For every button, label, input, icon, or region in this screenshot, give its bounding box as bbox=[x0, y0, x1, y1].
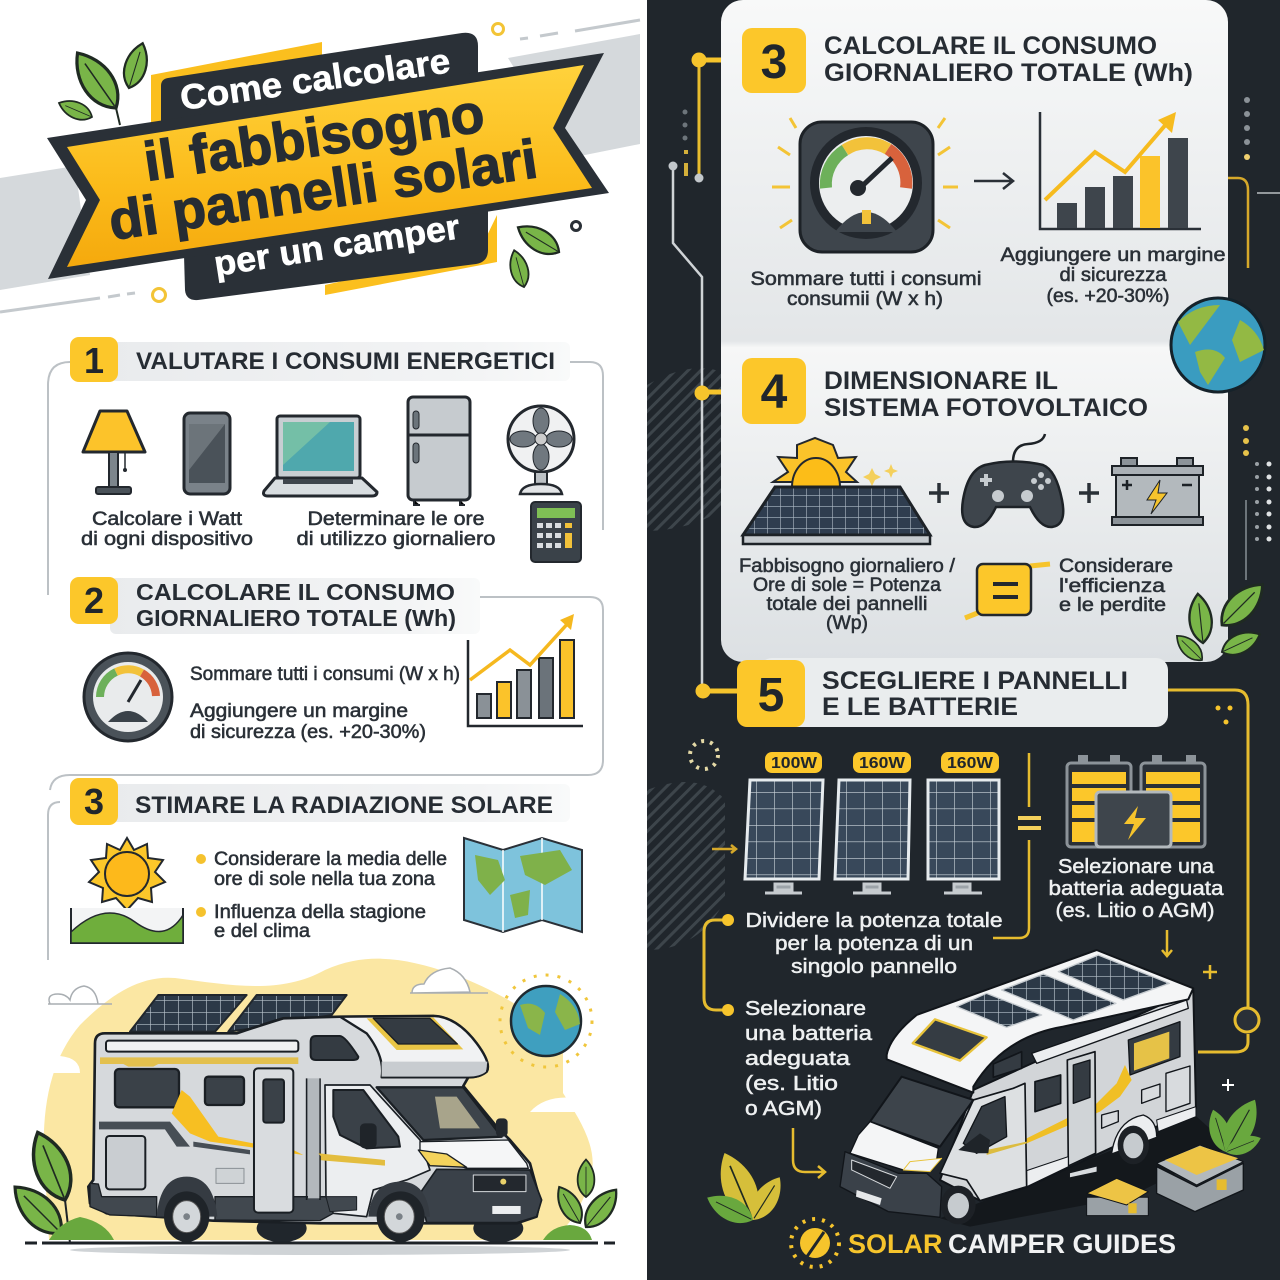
text: hours bbox=[296, 509, 496, 550]
side body bbox=[940, 990, 1196, 1201]
step bbox=[1070, 1167, 1097, 1177]
heading bar bbox=[110, 578, 480, 634]
white card bbox=[721, 0, 1228, 662]
number badge: 3 bbox=[761, 36, 787, 89]
caption right bbox=[1000, 245, 1226, 307]
number badge: 4 bbox=[761, 366, 788, 419]
heading bar bbox=[110, 342, 570, 381]
roof rail bbox=[1032, 1000, 1188, 1063]
icon: sun bbox=[773, 438, 898, 487]
yellow swoosh bbox=[172, 1090, 303, 1155]
hidden far wheels bbox=[257, 1214, 523, 1242]
caption: divide: per la potenza di un bbox=[775, 933, 973, 955]
storage hatch bbox=[106, 1136, 145, 1189]
heading bar bbox=[110, 784, 570, 822]
side windows bbox=[993, 1052, 1061, 1112]
wing mirror bbox=[496, 1118, 508, 1137]
cab bbox=[325, 1085, 430, 1217]
heading: STIMARE LA RADIAZIONE SOLARE bbox=[135, 792, 553, 819]
caption: select battery: o AGM) bbox=[745, 1098, 822, 1120]
roof panels bbox=[957, 955, 1169, 1027]
leaves top bbox=[56, 40, 153, 125]
heading bbox=[824, 32, 1193, 87]
text: hours: di utilizzo giornaliero bbox=[296, 529, 496, 550]
caption: efficiency bbox=[1059, 556, 1173, 616]
panel 160W right bbox=[928, 752, 999, 893]
text: watt bbox=[81, 509, 253, 550]
text: sum and margin bbox=[190, 664, 460, 743]
outline bbox=[50, 597, 603, 790]
hatches bbox=[1102, 1066, 1190, 1128]
leaves right bbox=[543, 1160, 624, 1240]
lower skirt bbox=[90, 1183, 357, 1221]
grey background bands bbox=[0, 34, 640, 290]
yellow backing tabs bbox=[151, 42, 497, 295]
icon: map bbox=[464, 838, 582, 932]
right yellow connector top bbox=[1225, 178, 1248, 268]
main title line 1: il fabbisogno bbox=[140, 81, 488, 193]
main title line 2: di pannelli solari bbox=[105, 127, 541, 252]
right yellow connector lower bbox=[1168, 690, 1248, 1052]
heading bar bbox=[760, 658, 1168, 727]
sparkle ring bbox=[690, 741, 718, 769]
number badge bbox=[742, 358, 806, 424]
heading: GIORNALIERO TOTALE (Wh) bbox=[136, 605, 456, 631]
side windows bbox=[115, 1069, 244, 1107]
logo text: SOLAR bbox=[848, 1229, 942, 1259]
lit window bbox=[1128, 1022, 1180, 1075]
rear wheel bbox=[1112, 1115, 1157, 1164]
hood bbox=[850, 1122, 938, 1170]
caption: divide: Dividere la potenza totale bbox=[746, 910, 1002, 932]
plant left bbox=[702, 1147, 789, 1230]
number badge 1: 1 bbox=[84, 340, 104, 381]
rear wheel bbox=[164, 1191, 209, 1242]
section 1 panel bbox=[48, 337, 603, 595]
outline bbox=[48, 802, 60, 960]
icon: gauge meter bbox=[772, 118, 958, 252]
leaves bbox=[1172, 576, 1271, 666]
equals sign with line bbox=[993, 753, 1041, 938]
chart bbox=[1040, 112, 1201, 229]
caption: formula: Ore di sole = Potenza bbox=[753, 575, 941, 596]
body shell bbox=[88, 1016, 540, 1223]
roof and overcab bbox=[887, 950, 1193, 1093]
panel 100W bbox=[745, 752, 823, 893]
icon: fan bbox=[508, 406, 574, 494]
step 3 bbox=[742, 28, 1226, 310]
caption: select battery: (es. Litio bbox=[745, 1073, 838, 1095]
globe with rays bbox=[500, 975, 592, 1067]
dotted decor left bbox=[682, 110, 688, 140]
text: sum and margin: Aggiungere un margine bbox=[190, 701, 408, 722]
number badge 2 bbox=[70, 577, 118, 624]
hatch decoration bbox=[647, 368, 725, 950]
big box bbox=[1157, 1145, 1243, 1212]
subtitle top: Come calcolare bbox=[178, 41, 452, 118]
vent bbox=[216, 1168, 244, 1183]
top dark tab bbox=[161, 33, 478, 150]
panel 160W middle: 160W bbox=[859, 755, 906, 772]
heading: CALCOLARE IL CONSUMO bbox=[824, 32, 1157, 60]
leaves left bbox=[5, 1126, 114, 1243]
door bbox=[254, 1068, 293, 1213]
bracket connector bbox=[704, 914, 734, 1016]
connector lines and decor bbox=[647, 52, 1280, 1052]
number badge 2: 2 bbox=[84, 580, 104, 621]
panel 160W middle bbox=[835, 752, 911, 893]
caption: efficiency: Considerare bbox=[1059, 556, 1173, 577]
step 4 bbox=[739, 358, 1271, 666]
right white line bbox=[1257, 192, 1280, 194]
text: watt: Calcolare i Watt bbox=[92, 509, 243, 530]
heading: DIMENSIONARE IL bbox=[824, 367, 1058, 395]
skylight bbox=[913, 1019, 987, 1061]
ground line bbox=[25, 1243, 615, 1255]
caption: efficiency: l'efficienza bbox=[1059, 576, 1166, 597]
caption left: Sommare tutti i consumi bbox=[750, 269, 982, 290]
grey end dots bbox=[668, 162, 704, 182]
heading: E LE BATTERIE bbox=[822, 693, 1018, 721]
icon: smartphone bbox=[184, 413, 230, 494]
icon: fridge bbox=[408, 397, 470, 505]
caption: battery: Selezionare una bbox=[1058, 856, 1215, 878]
number badge bbox=[742, 28, 806, 93]
yellow sunny blob bbox=[44, 959, 593, 1240]
icon: calculator bbox=[531, 502, 581, 562]
logo sun bbox=[791, 1219, 839, 1267]
upper stripe bbox=[100, 1057, 298, 1067]
step 5 bbox=[704, 658, 1234, 1178]
caption: select battery: una batteria bbox=[745, 1023, 873, 1045]
arrow down bbox=[1162, 930, 1172, 956]
arrow to camper bbox=[793, 1128, 825, 1178]
caption: formula: Fabbisogno giornaliero / bbox=[739, 556, 956, 577]
heading bbox=[136, 579, 456, 631]
heading: VALUTARE I CONSUMI ENERGETICI bbox=[136, 348, 555, 375]
text: watt: di ogni dispositivo bbox=[81, 529, 253, 550]
caption: select battery: adeguata bbox=[745, 1048, 851, 1070]
windshield bbox=[870, 1077, 973, 1147]
ribbon inner yellow bbox=[67, 65, 592, 267]
badge feeders bbox=[699, 60, 745, 691]
logo text: CAMPER GUIDES bbox=[948, 1229, 1176, 1259]
front bumper bbox=[840, 1152, 942, 1217]
decorative dashes bbox=[0, 20, 640, 312]
hood bbox=[420, 1140, 528, 1168]
icon: gauge bbox=[84, 653, 172, 741]
caption right: (es. +20-30%) bbox=[1046, 286, 1170, 307]
text: hours: Determinare le ore bbox=[308, 509, 484, 530]
icon: laptop bbox=[264, 416, 377, 496]
heading: SCEGLIERE I PANNELLI bbox=[822, 667, 1128, 695]
section 2 panel bbox=[50, 577, 603, 790]
number badge 3: 3 bbox=[84, 781, 104, 822]
front wheel bbox=[377, 1191, 425, 1242]
roof rail bbox=[106, 1041, 298, 1052]
icon: batteries bbox=[1067, 755, 1205, 847]
yellow marks left bbox=[684, 150, 688, 176]
number badge 3 bbox=[70, 778, 118, 825]
caption: battery bbox=[1048, 856, 1224, 922]
panel 160W right: 160W bbox=[947, 755, 994, 772]
bullet list: ore di sole nella tua zona bbox=[214, 869, 435, 890]
rings bbox=[152, 24, 580, 302]
number badge: 5 bbox=[758, 669, 784, 722]
caption: efficiency: e le perdite bbox=[1059, 595, 1166, 616]
text: sum and margin: Sommare tutti i consumi (W x h) bbox=[190, 664, 460, 685]
heading: SISTEMA FOTOVOLTAICO bbox=[824, 394, 1148, 422]
caption: battery: (es. Litio o AGM) bbox=[1056, 900, 1214, 922]
leaves bottom bbox=[506, 218, 565, 289]
dotted decor right bbox=[1244, 97, 1250, 145]
caption: select battery bbox=[745, 998, 873, 1120]
overcab side window bbox=[311, 1036, 358, 1060]
icon: controller bbox=[962, 434, 1063, 527]
overcab bbox=[340, 1016, 488, 1077]
caption: divide bbox=[746, 910, 1002, 978]
heading bbox=[824, 367, 1148, 422]
icon: solar panel bbox=[743, 487, 930, 544]
skirt bbox=[1027, 1157, 1068, 1187]
upper yellow connector bbox=[698, 60, 700, 178]
outline bbox=[48, 362, 603, 595]
section 3 panel bbox=[48, 778, 582, 960]
small box bbox=[1087, 1178, 1148, 1216]
heading: GIORNALIERO TOTALE (Wh) bbox=[824, 59, 1193, 87]
icon: battery bbox=[1112, 458, 1203, 525]
skylight bbox=[367, 1017, 463, 1050]
small arrow to panels bbox=[712, 845, 736, 853]
front bumper bbox=[420, 1169, 542, 1223]
clouds bbox=[26, 968, 585, 1112]
caption: formula: totale dei pannelli bbox=[766, 594, 928, 615]
bullet list: Considerare la media delle bbox=[214, 849, 447, 870]
text: sum and margin: di sicurezza (es. +20-30%) bbox=[190, 722, 426, 743]
number badge 1 bbox=[70, 337, 118, 382]
front wheel bbox=[941, 1186, 976, 1224]
panel 100W: 100W bbox=[771, 755, 818, 772]
caption: divide: singolo pannello bbox=[791, 956, 957, 978]
caption right: Aggiungere un margine bbox=[1000, 245, 1226, 266]
ring node bbox=[1235, 1008, 1259, 1032]
ground shadow bbox=[940, 1117, 1230, 1227]
plant right bbox=[1204, 1093, 1267, 1160]
bullet list: e del clima bbox=[214, 921, 310, 942]
thin grey line right bbox=[1245, 500, 1247, 580]
caption right: di sicurezza bbox=[1060, 265, 1167, 286]
caption: formula: (Wp) bbox=[826, 613, 868, 634]
icon: equals card bbox=[965, 564, 1050, 618]
yellow dots right bbox=[1243, 425, 1249, 456]
camper illustration left bbox=[5, 959, 624, 1255]
roof solar panels bbox=[130, 995, 347, 1032]
icon: lamp bbox=[83, 411, 145, 494]
bullet list bbox=[196, 849, 447, 942]
subtitle bottom: per un camper bbox=[211, 207, 463, 284]
star bbox=[1203, 965, 1217, 979]
node dots bbox=[692, 52, 710, 698]
yellow swoosh bbox=[1027, 1065, 1132, 1143]
number badge bbox=[737, 660, 805, 727]
motorhome vehicle bbox=[88, 995, 542, 1242]
bullet list: Influenza della stagione bbox=[214, 902, 426, 923]
door bbox=[1067, 1052, 1096, 1166]
cab side bbox=[940, 1083, 1027, 1201]
globe bbox=[1171, 298, 1265, 392]
header banner bbox=[0, 20, 640, 312]
dot grid right bbox=[1255, 462, 1272, 542]
right dark panel bbox=[647, 0, 1280, 1280]
camper illustration right bbox=[702, 950, 1267, 1230]
arrow bbox=[974, 173, 1013, 189]
heading: CALCOLARE IL CONSUMO bbox=[136, 579, 455, 605]
caption: select battery: Selezionare bbox=[745, 998, 866, 1020]
windshield bbox=[377, 1087, 502, 1140]
dark stripes bbox=[99, 1122, 293, 1159]
caption left bbox=[750, 269, 982, 310]
dots near section 5 bbox=[1216, 706, 1232, 724]
icon: sun over hills bbox=[71, 838, 183, 943]
bottom dark tab bbox=[184, 205, 488, 300]
ribbon outer bbox=[47, 53, 609, 279]
bar chart bbox=[468, 614, 583, 726]
caption: battery: batteria adeguata bbox=[1048, 878, 1224, 900]
white vertical connector bbox=[673, 166, 702, 691]
plus bbox=[929, 483, 1099, 503]
motorhome vehicle bbox=[840, 950, 1243, 1227]
pillar bbox=[307, 1078, 320, 1200]
wheel arches bbox=[157, 1177, 430, 1217]
headlight bbox=[903, 1158, 942, 1172]
footer brand bbox=[791, 1219, 1176, 1267]
heading bbox=[822, 667, 1128, 721]
caption: formula bbox=[739, 556, 956, 634]
caption left: consumii (W x h) bbox=[787, 289, 943, 310]
star white bbox=[1222, 1079, 1234, 1091]
